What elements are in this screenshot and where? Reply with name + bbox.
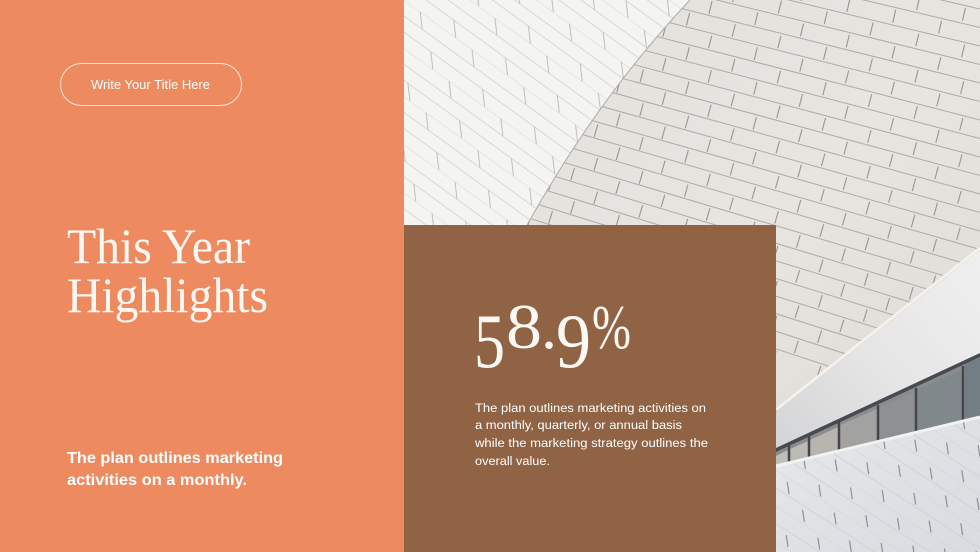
brown stat panel bbox=[404, 225, 776, 552]
photo: curved white wall bbox=[776, 250, 980, 450]
main heading: This Year bbox=[67, 218, 250, 274]
stat description bbox=[474, 401, 708, 468]
photo: ceiling edge highlight bbox=[776, 248, 980, 410]
stat description: The plan outlines marketing activities on bbox=[475, 401, 706, 415]
pill title badge bbox=[60, 64, 242, 106]
left subtitle bbox=[67, 450, 283, 489]
photo: lower white tiled panel bbox=[776, 417, 980, 552]
main heading: Highlights bbox=[67, 267, 268, 323]
stat description: while the marketing strategy outlines the bbox=[474, 436, 708, 450]
left subtitle: activities on a monthly. bbox=[67, 472, 247, 489]
stat description: overall value. bbox=[475, 454, 550, 468]
stat value: 9 bbox=[556, 298, 591, 384]
stat value: % bbox=[592, 294, 631, 362]
photo: white chevron-tiled roof bbox=[404, 0, 704, 226]
main heading bbox=[67, 218, 268, 323]
photo: window band bbox=[776, 353, 980, 468]
pill title badge: Write Your Title Here bbox=[91, 78, 210, 92]
stat description: a monthly, quarterly, or annual basis bbox=[475, 418, 682, 432]
stat value: . bbox=[541, 291, 557, 362]
left subtitle: The plan outlines marketing bbox=[67, 450, 283, 467]
architecture photo bbox=[404, 0, 980, 552]
stat value: 8 bbox=[506, 291, 542, 362]
stat value bbox=[474, 291, 631, 384]
photo: brick ceiling bbox=[527, 0, 980, 425]
stat value: 5 bbox=[474, 298, 505, 384]
left orange panel bbox=[0, 0, 404, 552]
